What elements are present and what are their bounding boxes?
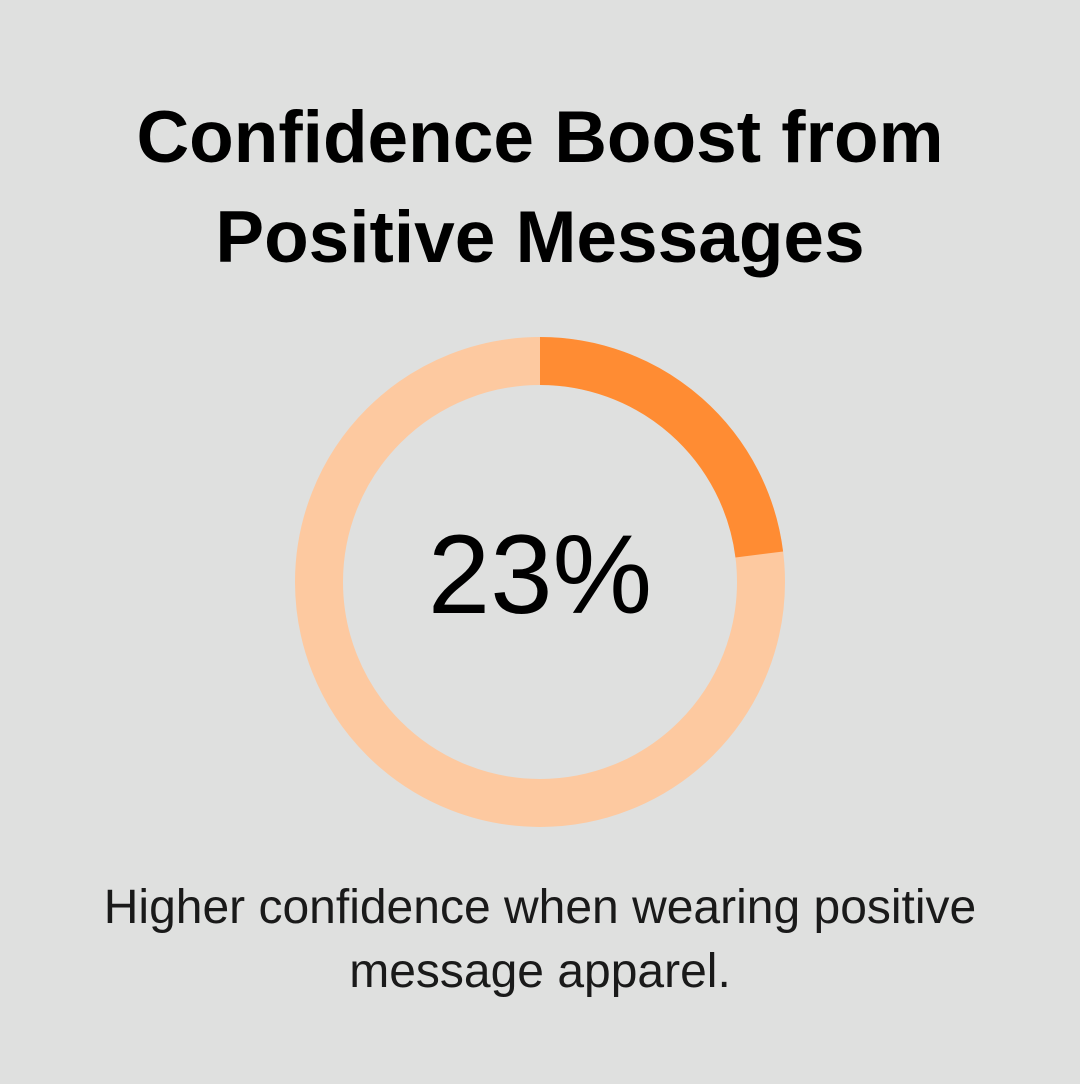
percentage value: 23%: [428, 512, 652, 637]
title: Confidence Boost from: [136, 97, 944, 178]
caption: Higher confidence when wearing positive: [104, 881, 976, 934]
title: Positive Messages: [215, 197, 865, 278]
caption: [104, 881, 976, 998]
caption: message apparel.: [349, 945, 731, 998]
title: [136, 97, 944, 278]
